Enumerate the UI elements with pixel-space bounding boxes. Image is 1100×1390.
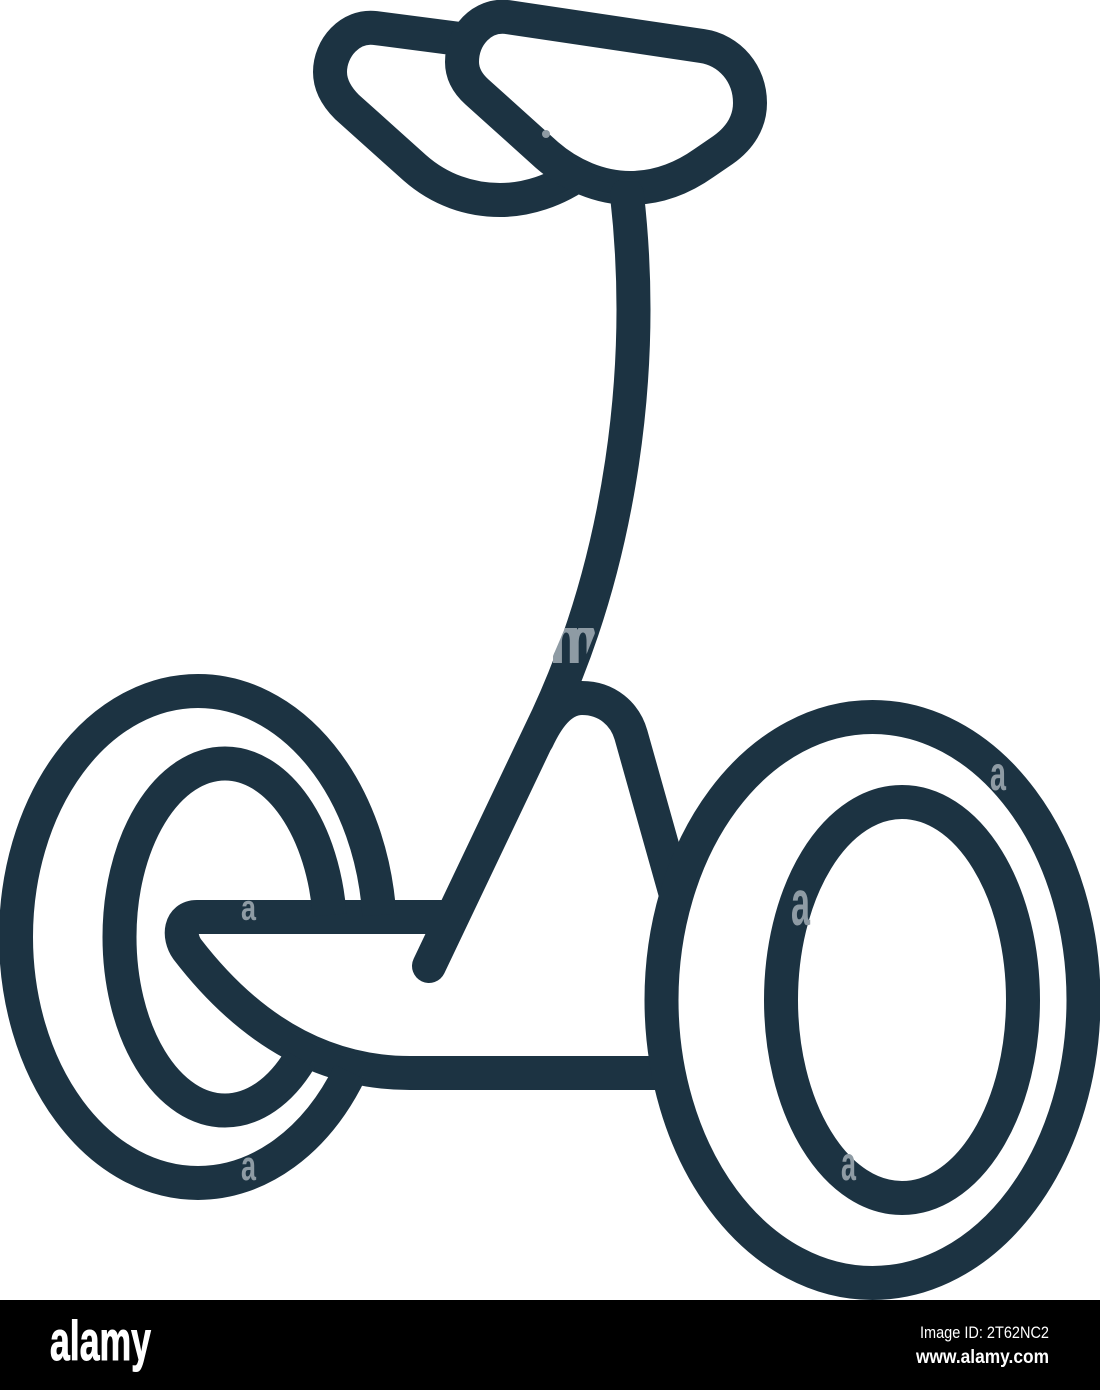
footer bar — [0, 1300, 1100, 1390]
faint watermark fragments: a — [990, 748, 1006, 801]
right inner rim — [781, 802, 1023, 1198]
back seat pad — [330, 28, 585, 200]
faint watermark fragments — [241, 130, 1006, 1191]
steering stem and hump — [429, 195, 676, 966]
faint watermark fragments: a — [841, 1138, 856, 1191]
front seat pad — [462, 17, 750, 188]
foot platform — [182, 917, 665, 1073]
right outer tyre — [662, 717, 1084, 1283]
faint watermark fragments: a — [241, 887, 257, 928]
website: www.alamy.com — [915, 1347, 1049, 1368]
image id: Image ID: 2T62NC2 — [920, 1323, 1049, 1342]
left outer tyre — [16, 691, 379, 1183]
left inner rim — [120, 763, 330, 1110]
brand logo: alamy — [50, 1309, 151, 1372]
faint watermark fragments: a — [241, 1142, 256, 1189]
faint watermark fragments: a — [791, 867, 810, 939]
faint watermark fragments: m — [550, 599, 598, 679]
